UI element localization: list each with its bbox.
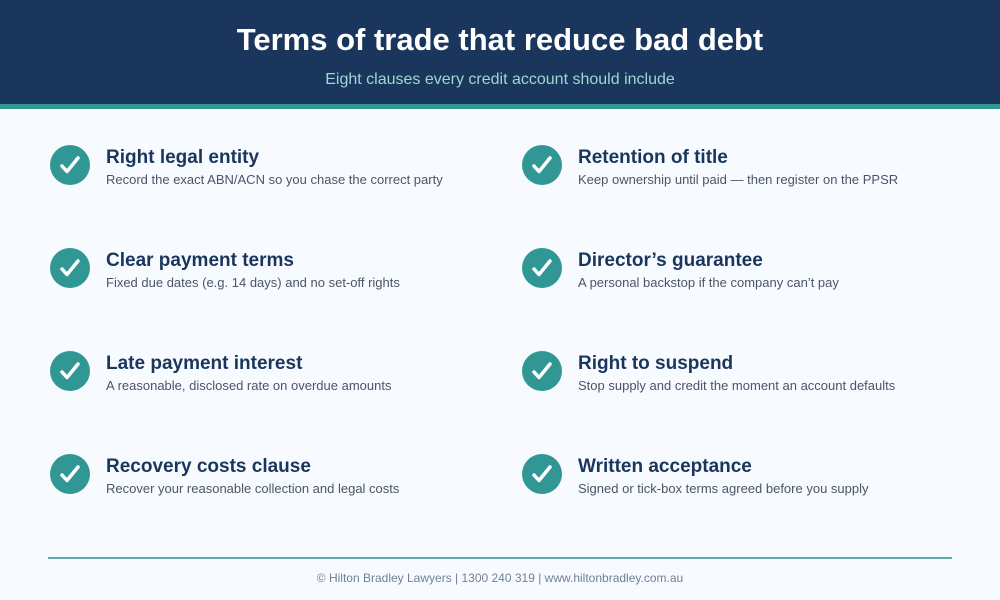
item: clear payment terms — [50, 248, 400, 290]
icon: check — [50, 454, 90, 494]
item: right to suspend — [522, 351, 895, 393]
description: A reasonable, disclosed rate on overdue amounts — [106, 378, 391, 393]
icon: check — [522, 351, 562, 391]
heading: Retention of title — [578, 147, 728, 168]
icon: check — [522, 248, 562, 288]
heading: Clear payment terms — [106, 250, 294, 271]
icon: check — [50, 145, 90, 185]
icon: check — [50, 351, 90, 391]
description: Fixed due dates (e.g. 14 days) and no set-off rights — [106, 275, 400, 290]
item: recovery costs clause — [50, 454, 399, 496]
description: Keep ownership until paid — then register on the PPSR — [578, 172, 898, 187]
footer: © Hilton Bradley Lawyers | 1300 240 319 | www.hiltonbradley.com.au — [317, 571, 683, 585]
heading: Director’s guarantee — [578, 250, 763, 271]
description: A personal backstop if the company can’t pay — [578, 275, 839, 290]
item: late payment interest — [50, 351, 391, 393]
icon: check — [522, 454, 562, 494]
item: director's guarantee — [522, 248, 839, 290]
description: Recover your reasonable collection and legal costs — [106, 481, 399, 496]
subtitle: Eight clauses every credit account should include — [325, 71, 675, 88]
description: Stop supply and credit the moment an account defaults — [578, 378, 895, 393]
description: Record the exact ABN/ACN so you chase the correct party — [106, 172, 443, 187]
heading: Recovery costs clause — [106, 456, 311, 477]
teal accent bar — [0, 104, 1000, 109]
header band — [0, 0, 1000, 104]
item: retention of title — [522, 145, 898, 187]
description: Signed or tick-box terms agreed before you supply — [578, 481, 868, 496]
heading: Written acceptance — [578, 456, 752, 477]
heading: Right legal entity — [106, 147, 259, 168]
item: written acceptance — [522, 454, 868, 496]
title: Terms of trade that reduce bad debt — [237, 22, 763, 57]
item: right legal entity — [50, 145, 443, 187]
heading: Late payment interest — [106, 353, 302, 374]
heading: Right to suspend — [578, 353, 733, 374]
icon: check — [50, 248, 90, 288]
icon: check — [522, 145, 562, 185]
